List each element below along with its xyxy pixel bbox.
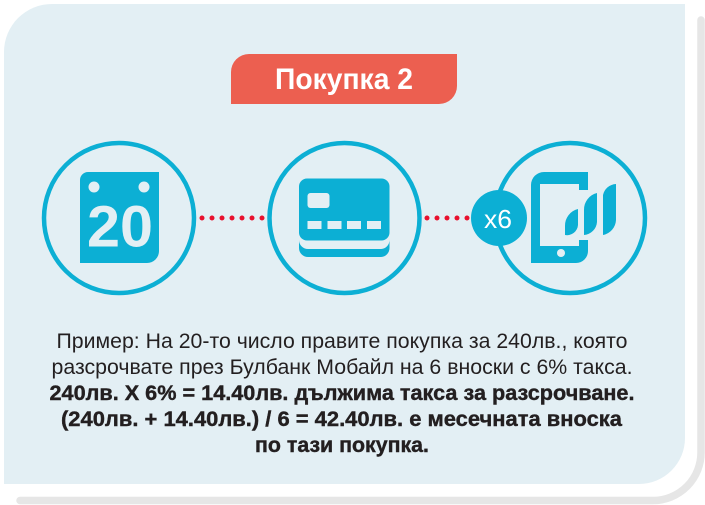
- icon: calendar: [80, 172, 159, 263]
- explanation text: Пример: На 20-то число правите покупка за 240лв., която: [56, 330, 628, 353]
- explanation text: [50, 330, 634, 457]
- card step: [270, 143, 420, 293]
- dotted connector 2: [424, 216, 470, 220]
- heading badge: [231, 54, 457, 104]
- explanation text: по тази покупка.: [255, 434, 429, 457]
- explanation text: (240лв. + 14.40лв.) / 6 = 42.40лв. е месечната вноска: [61, 408, 622, 431]
- icon: phone with logo: [531, 172, 616, 263]
- badge: x6: [471, 190, 527, 246]
- icon: calendar: 20: [87, 194, 153, 260]
- explanation text: 240лв. Х 6% = 14.40лв. дължима такса за разсрочване.: [50, 382, 634, 405]
- explanation text: разсрочвате през Булбанк Мобайл на 6 вноски с 6% такса.: [52, 356, 632, 379]
- heading badge: Покупка 2: [275, 63, 413, 96]
- calendar step: [44, 143, 194, 293]
- dotted connector 1: [200, 216, 264, 220]
- badge: x6: x6: [484, 204, 512, 234]
- icon: credit card: [299, 178, 390, 257]
- mobile app step: [471, 143, 645, 293]
